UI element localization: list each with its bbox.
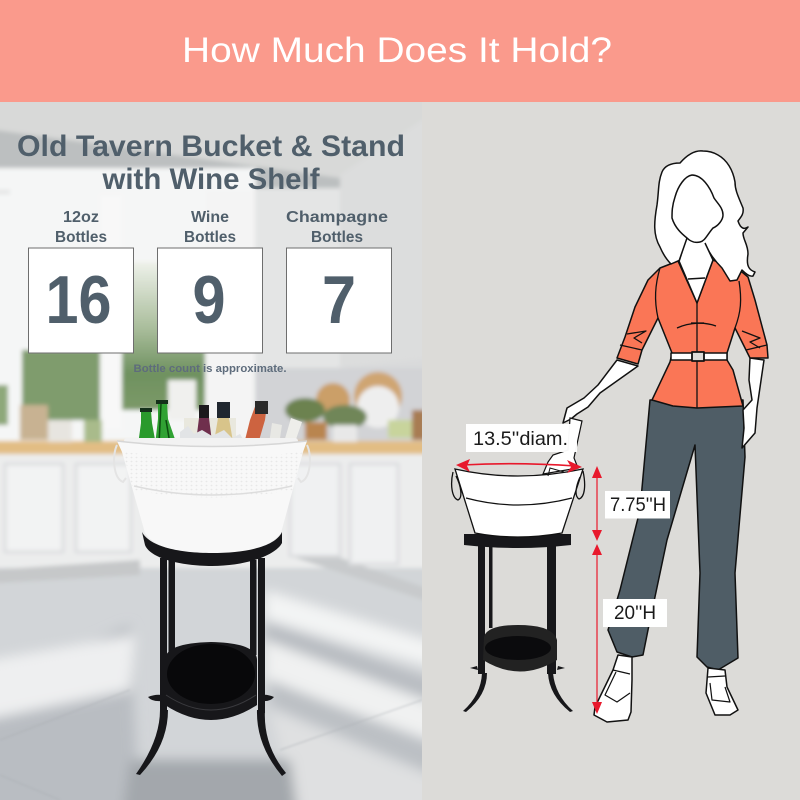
column labels: Wine: [191, 209, 229, 226]
right shoe: [706, 668, 738, 715]
neckline: [679, 238, 713, 303]
header title: How Much Does It Hold?: [182, 31, 612, 70]
bucket illustration: [452, 468, 585, 537]
column labels: [55, 209, 388, 246]
illustration shelf interior: [485, 636, 551, 660]
product title: Old Tavern Bucket & Stand: [17, 130, 405, 163]
bottles and ice: [124, 400, 302, 447]
count box: champagne bottles: 7: [322, 262, 356, 338]
stand: [136, 532, 286, 776]
left shoe: [594, 655, 632, 722]
diameter label: 13.5''diam.: [473, 428, 568, 450]
column labels: 12oz: [63, 209, 99, 226]
stand illustration: [463, 534, 573, 712]
stand height label: [603, 599, 667, 627]
photo: bucket with bottles and stand: [114, 400, 310, 776]
belt: [671, 352, 727, 361]
diameter dimension arrow: [456, 459, 582, 473]
shoe details: [605, 670, 730, 702]
count box: champagne bottles: [286, 248, 392, 353]
approximate note: Bottle count is approximate.: [134, 363, 286, 375]
right panel background: [422, 102, 800, 800]
product title: [17, 130, 405, 196]
woman illustration: [563, 151, 768, 722]
blouse: [617, 260, 768, 408]
column labels: Bottles: [184, 229, 236, 246]
height arrow: stand: [592, 544, 602, 714]
left arm with hand: [742, 358, 764, 448]
bottle in illustration: [543, 418, 582, 474]
right arm with hand: [563, 360, 638, 423]
column labels: Champagne: [286, 209, 388, 226]
bucket height label: 7.75''H: [610, 494, 666, 516]
column labels: Bottles: [55, 229, 107, 246]
diameter label: [466, 424, 577, 452]
count box: wine bottles: 9: [192, 262, 226, 338]
blouse seams: [620, 268, 767, 408]
count box: wine bottles: [158, 248, 262, 353]
product title: with Wine Shelf: [102, 163, 320, 196]
bucket: [117, 441, 307, 554]
column labels: Bottles: [311, 229, 363, 246]
stand height label: 20''H: [614, 602, 656, 624]
count box: 12oz bottles: 16: [46, 262, 112, 338]
pants: [608, 400, 745, 670]
header band: [0, 0, 800, 102]
face: [672, 175, 723, 242]
neck: [680, 238, 713, 303]
hair: [655, 151, 755, 281]
kitchen photo background: [0, 128, 422, 800]
height arrow: bucket: [592, 466, 602, 541]
count box: 12oz bottles: [28, 248, 134, 353]
